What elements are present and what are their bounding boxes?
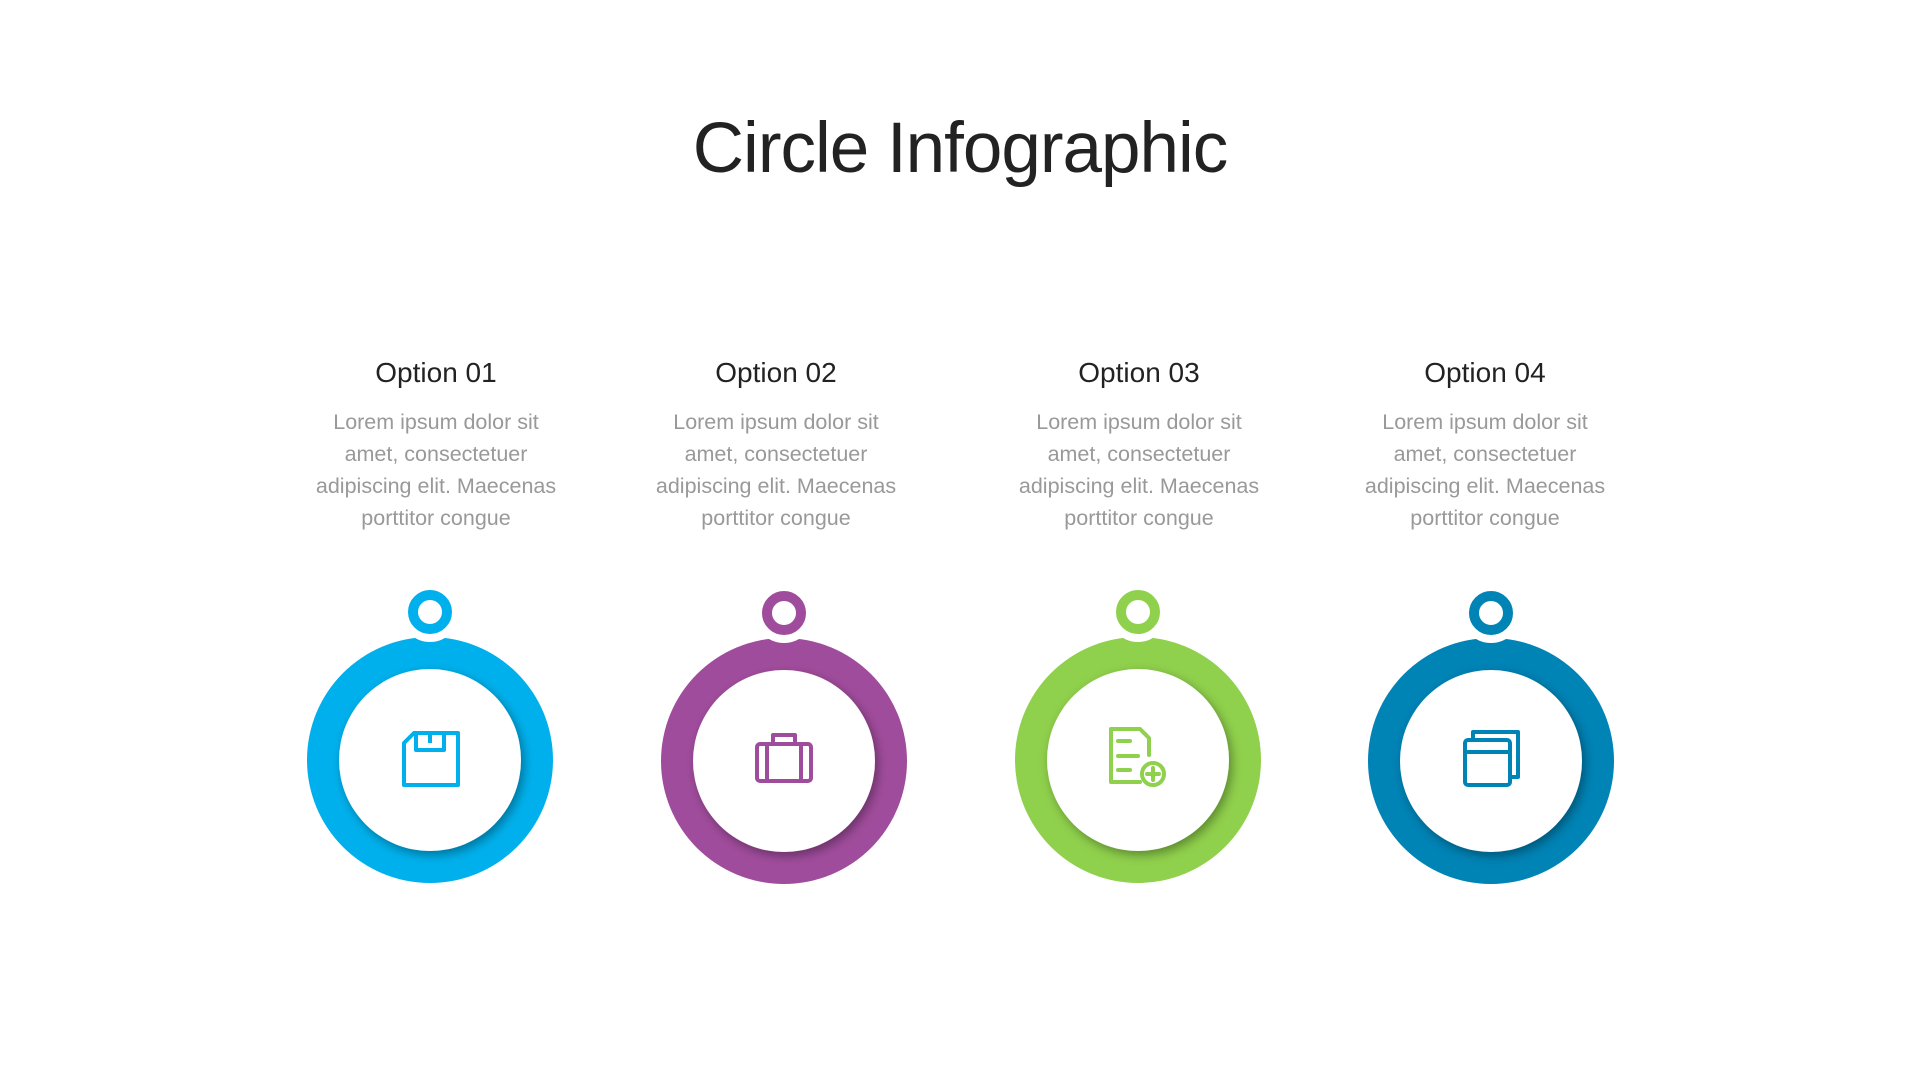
text: option 01: Option 01 [375, 357, 497, 388]
text: option 02: Lorem ipsum dolor sit amet, consectetuer adipiscing elit. Maecenas porttitor congue [656, 410, 896, 530]
text: option 02: Option 02 [715, 357, 837, 388]
text: option 03: Lorem ipsum dolor sit amet, consectetuer adipiscing elit. Maecenas porttitor congue [1019, 410, 1259, 530]
icon: briefcase [757, 735, 811, 781]
text: option 04: Option 04 [1424, 357, 1546, 388]
circle 1 [307, 582, 553, 883]
circle 4 [1368, 583, 1614, 884]
icon: windows [1465, 732, 1518, 785]
circle 3 [1015, 582, 1261, 883]
circle 2 [661, 583, 907, 884]
text: option 01: Lorem ipsum dolor sit amet, consectetuer adipiscing elit. Maecenas porttitor congue [316, 410, 556, 530]
icon: floppy disk [404, 733, 458, 785]
text: option 03 [1019, 357, 1259, 530]
title: Circle Infographic [693, 109, 1227, 188]
text: option 04 [1365, 357, 1605, 530]
text: option 01 [316, 357, 556, 530]
text: option 04: Lorem ipsum dolor sit amet, consectetuer adipiscing elit. Maecenas porttitor congue [1365, 410, 1605, 530]
text: option 03: Option 03 [1078, 357, 1200, 388]
text: option 02 [656, 357, 896, 530]
icon: document add [1111, 729, 1164, 785]
